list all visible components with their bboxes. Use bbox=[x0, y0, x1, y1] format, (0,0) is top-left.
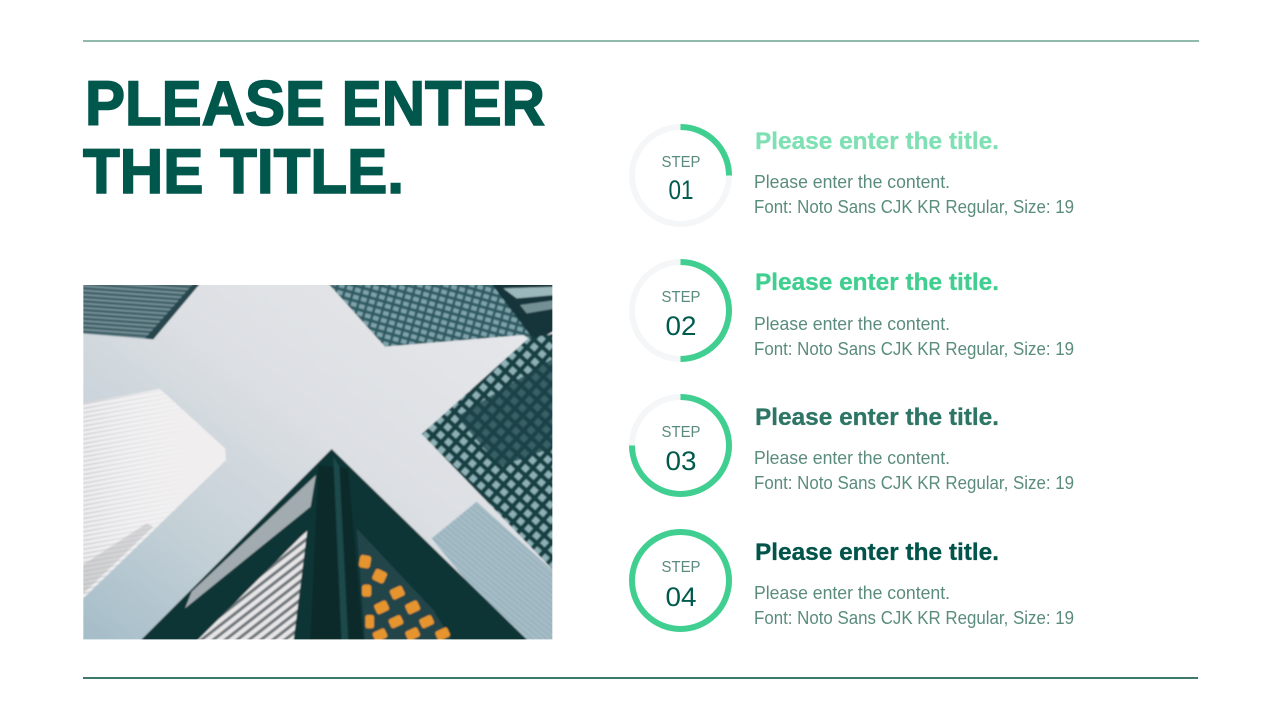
step label 02 bbox=[662, 289, 700, 341]
step body 4 bbox=[754, 583, 1074, 628]
step label 02: 02 bbox=[666, 311, 696, 341]
step 4 bbox=[632, 532, 1074, 629]
step label 03: 03 bbox=[666, 446, 696, 476]
step body 1 bbox=[754, 172, 1074, 217]
step label 02: STEP bbox=[662, 289, 700, 306]
step heading 4: Please enter the title. bbox=[755, 539, 999, 566]
top rule bbox=[83, 40, 1199, 42]
step label 04: 04 bbox=[666, 582, 696, 612]
step heading 1: Please enter the title. bbox=[755, 128, 999, 155]
progress ring 25% bbox=[632, 127, 729, 224]
step body 3 bbox=[754, 448, 1074, 493]
step body 2 bbox=[754, 314, 1074, 359]
step 2 bbox=[632, 262, 1074, 359]
step body 2: Font: Noto Sans CJK KR Regular, Size: 19 bbox=[754, 339, 1074, 359]
progress ring 100% bbox=[632, 532, 729, 629]
progress ring 50% bbox=[632, 262, 729, 359]
progress ring 75% bbox=[632, 397, 729, 494]
title: PLEASE ENTER bbox=[85, 69, 545, 139]
step label 01: STEP bbox=[662, 154, 700, 171]
photo: skyscrapers viewed from below bbox=[80, 282, 556, 643]
step 3 bbox=[632, 397, 1074, 494]
title bbox=[83, 69, 545, 207]
step body 3: Please enter the content. bbox=[754, 448, 950, 468]
step body 1: Please enter the content. bbox=[754, 172, 950, 192]
step label 03: STEP bbox=[662, 424, 700, 441]
step body 1: Font: Noto Sans CJK KR Regular, Size: 19 bbox=[754, 197, 1074, 217]
step heading 2: Please enter the title. bbox=[755, 269, 999, 296]
step label 01: 01 bbox=[668, 175, 694, 205]
step label 03 bbox=[662, 424, 700, 476]
step label 01 bbox=[662, 154, 700, 205]
step body 3: Font: Noto Sans CJK KR Regular, Size: 19 bbox=[754, 473, 1074, 493]
step 1 bbox=[632, 127, 1074, 224]
title: THE TITLE. bbox=[83, 137, 404, 207]
step label 04: STEP bbox=[662, 559, 700, 576]
step body 4: Please enter the content. bbox=[754, 583, 950, 603]
bottom rule bbox=[83, 677, 1198, 679]
step heading 3: Please enter the title. bbox=[755, 404, 999, 431]
step body 2: Please enter the content. bbox=[754, 314, 950, 334]
step label 04 bbox=[662, 559, 700, 612]
step body 4: Font: Noto Sans CJK KR Regular, Size: 19 bbox=[754, 608, 1074, 628]
